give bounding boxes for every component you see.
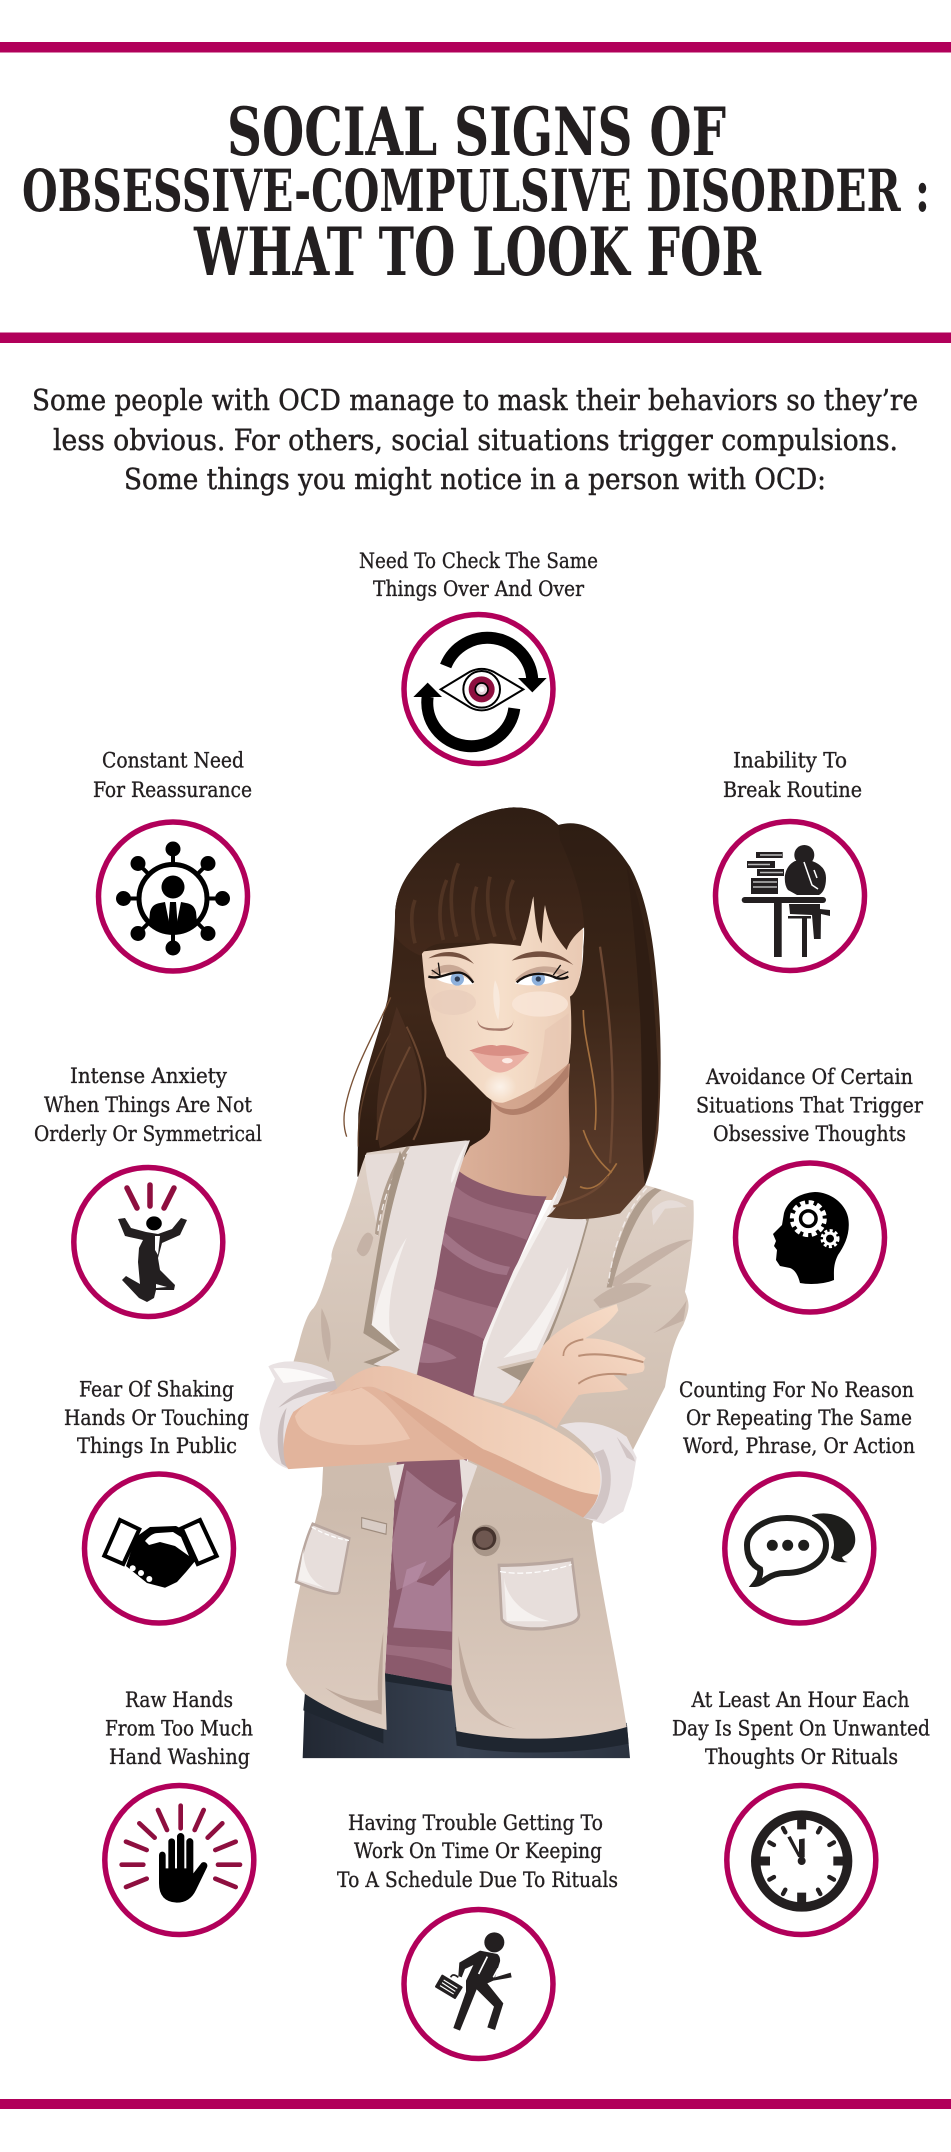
title <box>22 93 930 291</box>
top divider bar <box>0 42 951 52</box>
label: Constant Need <box>102 748 244 772</box>
right pocket <box>499 1560 579 1629</box>
right hair strands <box>580 1010 617 1188</box>
label: Obsessive Thoughts <box>713 1122 906 1146</box>
intro text <box>32 383 918 496</box>
item: avoidance of certain situations <box>696 1065 924 1312</box>
label: Fear Of Shaking <box>79 1378 234 1402</box>
upper forearm <box>330 1366 603 1518</box>
label: At Least An Hour Each <box>691 1688 910 1712</box>
icon: person sitting at desk <box>716 822 864 970</box>
intro text: less obvious. For others, social situations trigger compulsions. <box>53 423 898 457</box>
fringe <box>395 807 590 956</box>
label <box>64 1378 249 1458</box>
label <box>93 748 252 802</box>
label: Need To Check The Same <box>359 549 598 573</box>
jacket left panel and sleeve <box>283 1140 467 1730</box>
label: Work On Time Or Keeping <box>354 1839 602 1863</box>
face <box>422 897 583 1103</box>
label: From Too Much <box>105 1717 253 1741</box>
icon: speech bubbles <box>725 1474 874 1623</box>
label: For Reassurance <box>93 778 252 802</box>
title: SOCIAL SIGNS OF <box>227 93 726 171</box>
rolled left cuff <box>259 1361 338 1469</box>
nose <box>478 1020 513 1031</box>
right lapel <box>473 1176 592 1404</box>
jacket right panel and sleeve <box>452 1180 694 1739</box>
label: Thoughts Or Rituals <box>705 1745 898 1769</box>
outfit <box>259 1140 694 1758</box>
cheeks and jaw shading <box>431 980 569 1101</box>
lower lapel tips <box>388 1458 477 1505</box>
label <box>723 748 862 802</box>
item: counting for no reason <box>679 1378 915 1623</box>
lower forearm <box>284 1381 503 1469</box>
bottom divider bar <box>0 2099 951 2109</box>
button <box>472 1525 500 1556</box>
icon: head with gears <box>736 1163 884 1312</box>
label: Avoidance Of Certain <box>705 1065 913 1089</box>
trousers <box>303 1673 630 1758</box>
label: To A Schedule Due To Rituals <box>337 1868 618 1892</box>
label: Hand Washing <box>109 1745 250 1769</box>
label <box>105 1688 253 1769</box>
neck <box>453 1063 570 1200</box>
icon: clock <box>727 1786 876 1934</box>
right hair <box>547 823 661 1219</box>
label: Intense Anxiety <box>70 1064 227 1088</box>
label: Hands Or Touching <box>64 1406 249 1430</box>
eyebrows <box>428 951 573 965</box>
label: Counting For No Reason <box>679 1378 914 1402</box>
fringe strands <box>412 863 515 943</box>
intro text: Some things you might notice in a person with OCD: <box>124 462 826 496</box>
face and front hair <box>395 807 661 1219</box>
icon: raised hand with rays <box>105 1786 254 1934</box>
item: fear of shaking hands <box>64 1378 249 1623</box>
label: Word, Phrase, Or Action <box>683 1434 915 1458</box>
label <box>696 1065 924 1146</box>
illustration: woman with crossed arms <box>259 807 694 1758</box>
item: inability to break routine <box>716 748 864 970</box>
icon: eye with rotating arrows <box>404 614 553 764</box>
left pocket <box>296 1518 387 1594</box>
item: trouble getting to work <box>337 1811 618 2058</box>
label: When Things Are Not <box>44 1093 253 1117</box>
label <box>359 549 598 601</box>
label: Situations That Trigger <box>696 1094 924 1118</box>
back hair <box>344 807 573 1177</box>
title divider bar <box>0 332 951 343</box>
rolled right cuff <box>560 1422 637 1524</box>
hand on arm <box>502 1304 646 1429</box>
item: at least an hour each day <box>672 1688 930 1934</box>
label: Inability To <box>733 748 847 772</box>
icon: handshake <box>84 1474 234 1623</box>
eyes <box>428 963 568 986</box>
item: check the same things <box>359 549 598 764</box>
label: Raw Hands <box>125 1688 233 1712</box>
lips <box>469 1045 529 1073</box>
label: Having Trouble Getting To <box>348 1811 603 1835</box>
label <box>337 1811 618 1892</box>
item: intense anxiety <box>34 1064 262 1316</box>
left lapel <box>363 1140 470 1379</box>
label: Things Over And Over <box>373 577 585 601</box>
label: Break Routine <box>723 778 862 802</box>
icon: jumping stressed person <box>74 1168 223 1316</box>
item: constant need for reassurance <box>93 748 252 971</box>
label <box>34 1064 262 1146</box>
label: Or Repeating The Same <box>686 1406 912 1430</box>
jacket folds <box>321 1147 692 1729</box>
label: Things In Public <box>77 1434 237 1458</box>
icon: person running with briefcase <box>404 1910 553 2058</box>
top: striped shirt <box>385 1169 547 1686</box>
label <box>679 1378 915 1458</box>
label <box>672 1688 930 1769</box>
item: raw hands <box>105 1688 254 1934</box>
icon: person in network <box>98 822 248 971</box>
label: Orderly Or Symmetrical <box>34 1122 262 1146</box>
